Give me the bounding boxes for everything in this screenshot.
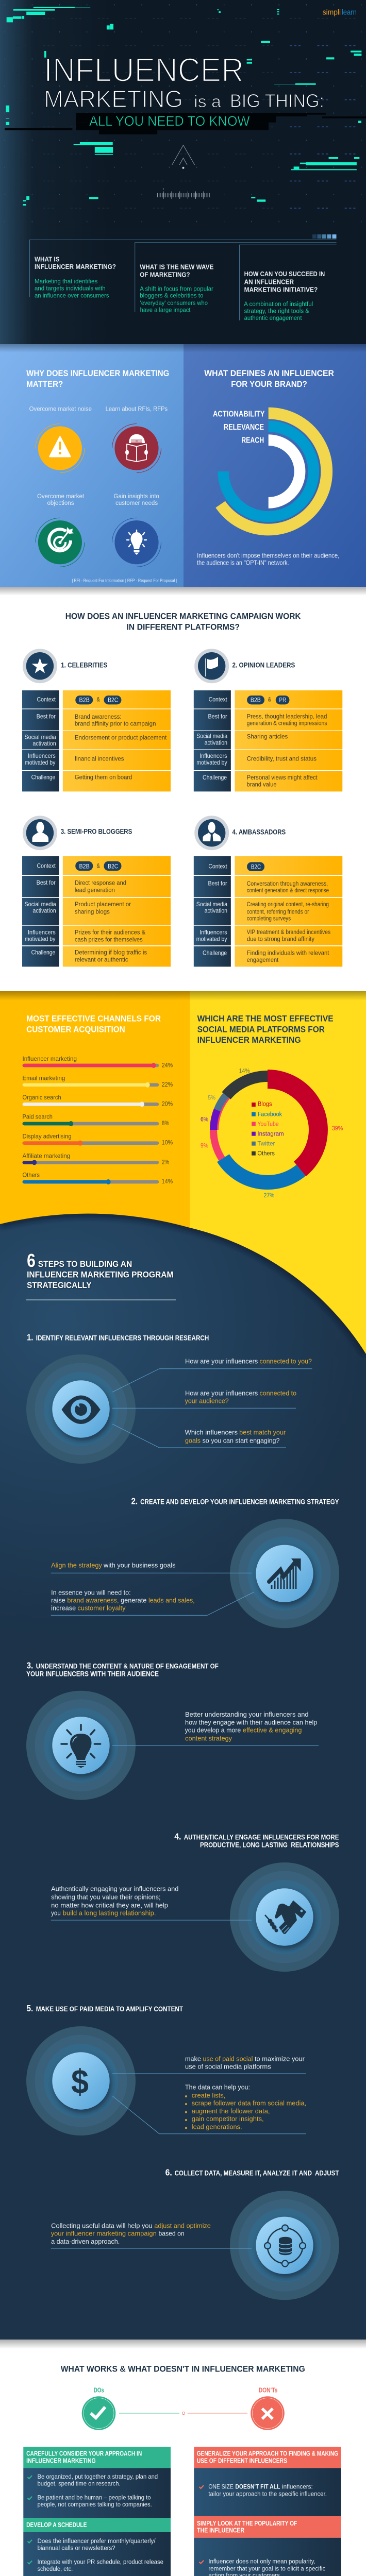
benefit labels: Learn about RFIs, RFPs [106,406,168,413]
bar chart: Organic search [22,1094,61,1101]
engagement text: Authentically engaging your influencers and [51,1886,178,1893]
icon: check badge [82,2396,115,2430]
text block: new wave of marketing: OF MARKETING? [140,271,190,279]
table: opinion leaders: Personal views might affect [247,774,318,781]
table: ambassadors: activation [205,907,227,914]
title: is a [194,92,221,111]
donut percentages: 5% [208,1094,215,1101]
text block: what is influencer marketing: WHAT IS [35,256,59,263]
table: celebrities: motivated by [25,759,55,766]
table: opinion leaders: B2B [251,697,261,704]
panel: don'ts: Influencer does not only mean popularity, [208,2558,315,2565]
heading [204,369,334,389]
heading [197,1014,334,1045]
donut percentages: 14% [239,1067,249,1074]
questions: so you can start engaging? [203,1437,280,1445]
table: opinion leaders: motivated by [196,759,227,766]
donut legend: Others [257,1150,275,1157]
table: ambassadors: Context [208,863,227,870]
data text: based on [158,2230,185,2238]
bar chart: Email marketing [22,1074,65,1081]
panel: don'ts: ONE SIZE [208,2484,234,2490]
strategy text: generate [121,1597,146,1604]
table: celebrities: Influencers [28,752,56,759]
strategy text: raise [51,1597,65,1604]
table: opinion leaders: PR [279,697,286,704]
heading: CUSTOMER ACQUISITION [26,1025,125,1035]
bar chart: Others [22,1172,40,1178]
table: semi-pro bloggers: sharing blogs [75,908,110,916]
heading: INFLUENCER MARKETING PROGRAM [27,1270,173,1280]
step 6 title [165,2168,339,2178]
step 3 title: UNDERSTAND THE CONTENT & NATURE OF ENGAGEMENT OF [36,1662,219,1670]
text block: new wave of marketing: A shift in focus from popular [140,285,213,293]
table: ambassadors: Challenge [203,950,227,956]
table: ambassadors: Finding individuals with relevant [247,950,329,957]
black title backing blocks [5,113,366,134]
table: opinion leaders: Challenge [203,774,227,781]
data text [51,2222,211,2245]
questions: connected to [260,1390,296,1397]
table: semi-pro bloggers: motivated by [25,936,55,942]
icon: reader with book [112,423,161,473]
table: celebrities: Best for [37,713,56,720]
panel: don'ts: influencers: [282,2484,313,2490]
bar chart: 22% [162,1081,173,1088]
table: semi-pro bloggers: Influencers [28,929,56,936]
data text: your influencer marketing campaign [51,2230,157,2238]
benefit labels: customer needs [115,500,158,506]
shadow under steps panel [0,2340,366,2349]
connector lines [51,1573,254,1615]
questions: How are your influencers [185,1390,258,1397]
table: celebrities: B2C [108,697,118,704]
panel: dos: people, not companies talking to companies. [37,2501,152,2508]
table: ambassadors: Best for [208,879,227,887]
strategy text: leads and sales, [148,1597,195,1604]
panel: dos: schedule, etc. [37,2566,73,2572]
table: semi-pro bloggers: Prizes for their audiences & [75,929,145,936]
questions: Which influencers [185,1429,238,1436]
questions: How are your influencers [185,1358,258,1365]
bar chart: Paid search [22,1113,53,1120]
donut legend: Instagram [257,1131,284,1138]
questions: goals [185,1437,201,1445]
benefit labels [29,406,168,506]
icon: light bulb [112,518,161,567]
icon: dollar [26,2026,136,2136]
label: opinion leaders: 2. OPINION LEADERS [232,661,295,669]
table: opinion leaders: Influencers [199,752,227,759]
colour squares [312,234,336,239]
bar chart: 20% [162,1100,173,1107]
table: semi-pro bloggers: Direct response and [75,880,126,887]
text block: how to succeed: authentic engagement [244,315,302,321]
icon: growth chart [230,1519,339,1628]
panel: dos: DEVELOP A SCHEDULE [26,2521,87,2529]
donut legend: Twitter [257,1141,275,1147]
bar chart: 8% [162,1120,169,1127]
table: semi-pro bloggers: Context [37,862,56,869]
icon: eye [26,1354,136,1464]
table: celebrities: Context [37,696,56,703]
heading: WHY DOES INFLUENCER MARKETING [26,369,169,378]
icon: handshake [230,1862,339,1972]
paid media text: to maximize your [255,2055,305,2063]
text block: how to succeed: strategy, the right tools & [244,308,309,315]
step 5 title: 5. [27,2004,33,2013]
strategy text: In essence you will need to: [51,1589,131,1597]
benefit labels: Overcome market noise [29,406,92,413]
icon: dollar: $ [71,2062,89,2100]
icon: warning [36,423,85,473]
connector [119,2412,247,2415]
table: opinion leaders: Best for [208,713,227,720]
note [197,552,339,567]
step 5 title: MAKE USE OF PAID MEDIA TO AMPLIFY CONTENT [36,2005,184,2013]
icon: cross badge [251,2396,285,2430]
paid media text: lead generations. [192,2123,242,2131]
heading: STRATEGICALLY [27,1281,92,1290]
strategy text: increase [51,1605,76,1612]
icon: data ring [230,2191,339,2300]
engagement text [51,1886,178,1917]
connector line [51,1920,252,1921]
questions: best match your [239,1429,286,1436]
text block: how to succeed: AN INFLUENCER [244,278,294,286]
panel: dos: biannual calls or newsletters? [37,2545,115,2552]
engagement text: showing that you value their opinions; [51,1894,161,1901]
paid media text: The data can help you: [185,2084,250,2091]
step 3 title [26,1660,219,1678]
table: semi-pro bloggers: Determining if blog traffic is [75,950,147,956]
text block: new wave of marketing: have a large impact [140,307,190,314]
heading: MOST EFFECTIVE CHANNELS FOR [26,1014,161,1024]
table: opinion leaders: brand value [247,782,277,788]
donut percentages [201,1067,343,1199]
heading [27,1250,173,1290]
text block: new wave of marketing [140,264,213,314]
logo: learn [342,8,357,16]
table: celebrities: Social media [25,733,56,740]
labels [94,2387,277,2394]
table: ambassadors: Social media [196,901,227,908]
questions [185,1358,312,1445]
icon: star [23,649,57,683]
connector line [112,1745,319,1746]
benefit labels: Overcome market [37,493,84,500]
strategy text: customer loyalty [77,1605,126,1612]
icon: ruler ticks [157,189,210,199]
donut legend [252,1101,284,1157]
note: the audience is an "OPT-IN" network. [197,560,289,567]
panel: dos: Does the influencer prefer monthly/quarterly/ [37,2538,156,2545]
step 4 title: 4. [174,1832,181,1842]
table: semi-pro bloggers: Social media [25,901,56,908]
table: semi-pro bloggers: relevant or authentic [75,956,128,963]
donut percentages: 39% [332,1125,343,1132]
step 5 [26,2004,306,2136]
table: celebrities: B2B [79,697,90,704]
table: opinion leaders [194,690,342,791]
donut legend: Blogs [258,1101,272,1108]
paid media text: make [185,2055,201,2063]
heading [26,1014,161,1035]
check marks [199,2485,204,2564]
donut legend: YouTube [257,1121,279,1128]
step 1 [26,1333,312,1464]
donut percentages: 27% [264,1192,274,1199]
panel: dos [23,2447,171,2576]
heading: IN DIFFERENT PLATFORMS? [126,622,240,632]
understanding text: Better understanding your influencers and [185,1711,309,1718]
bar chart: 14% [162,1178,173,1185]
title: INFLUENCER [44,51,244,89]
table: opinion leaders: Credibility, trust and status [247,756,317,762]
bar chart: 24% [162,1061,173,1069]
panel: dos: Integrate with your PR schedule, product release [37,2559,163,2566]
text block: how to succeed [244,270,325,321]
shadow under blue panels [0,587,366,596]
step 4 [51,1832,339,1972]
understanding text: you develop a more [185,1727,241,1734]
paid media text: create lists, [192,2092,225,2099]
benefit labels: Gain insights into [114,493,159,500]
text block: new wave of marketing: WHAT IS THE NEW WAVE [140,264,213,271]
title: BIG THING: [230,90,324,111]
table: celebrities: brand affinity prior to campaign [75,721,156,727]
engagement text: build a long lasting relationship. [63,1909,156,1917]
paid media text: use of social media platforms [185,2063,271,2071]
step 3 title: YOUR INFLUENCERS WITH THEIR AUDIENCE [26,1670,159,1678]
radial chart: actionability, relevance, reach [221,413,327,530]
donut percentages: 9% [201,1142,208,1149]
text block: what is influencer marketing: an influence over consumers [35,293,109,299]
chart labels: REACH [241,435,264,445]
table: celebrities: financial incentives [75,756,124,762]
label: celebrities: 1. CELEBRITIES [61,661,107,669]
text block: what is influencer marketing: and targets individuals with [35,285,106,292]
engagement text: no matter how critical they are, will help [51,1902,168,1909]
table: ambassadors: motivated by [196,936,227,942]
text block: new wave of marketing: 'everyday' consumers who [140,300,208,307]
table: semi-pro bloggers: lead generation [75,887,115,894]
label: ambassadors: 4. AMBASSADORS [232,828,286,836]
questions: connected to you? [260,1358,312,1365]
panel: what defines an influencer [184,344,366,587]
step 4 title [174,1832,339,1849]
text block: what is influencer marketing [35,256,116,299]
panel: dos: Be patient and be human – people talking to [37,2495,151,2501]
panel: don'ts: DOESN'T FIT ALL [235,2484,280,2490]
table: celebrities: activation [32,740,56,747]
heading [65,612,301,632]
section: dos and don'ts [23,2364,341,2576]
table: ambassadors: due to strong brand affinity [247,936,315,943]
table: semi-pro bloggers: B2C [108,863,118,870]
cyan glitch fragments [6,7,361,206]
data text: adjust and optimize [154,2222,211,2230]
panel: don'ts: USE OF DIFFERENT INFLUENCERS [197,2457,287,2465]
table: ambassadors: B2C [251,864,261,871]
section: campaign types [22,612,342,967]
table: semi-pro bloggers: B2B [79,863,90,870]
text block: how to succeed: A combination of insightful [244,301,313,308]
understanding text: how they engage with their audience can help [185,1719,317,1726]
panel: social media platforms [190,991,366,1360]
strategy text [51,1562,195,1612]
labels: DOs [94,2387,104,2394]
paid media text [185,2055,306,2131]
table: semi-pro bloggers: activation [32,907,56,914]
table: ambassadors [194,856,342,967]
paid media text: gain competitor insights, [192,2115,264,2123]
table: celebrities: Challenge [31,773,56,781]
step 2 title: 2. [131,1496,138,1506]
table: ambassadors: engagement [247,957,278,963]
paid media text: scrape follower data from social media, [192,2099,306,2107]
donut percentages: 6% [201,1116,208,1123]
step 1 title [27,1333,209,1343]
paid media text: augment the follower data, [192,2108,270,2115]
label: semi-pro bloggers: 3. SEMI-PRO BLOGGERS [61,827,132,836]
text block: what is influencer marketing: Marketing that identifies [35,278,97,285]
panel: dos: CAREFULLY CONSIDER YOUR APPROACH IN [26,2450,142,2458]
strategy text: brand awareness, [67,1597,119,1604]
icon: target [36,518,85,567]
bar chart [22,1055,173,1185]
bar chart: Affiliate marketing [22,1152,70,1159]
understanding text: effective & engaging [243,1727,302,1734]
text block: new wave of marketing: bloggers & celebrities to [140,293,203,299]
table: semi-pro bloggers: & [96,862,100,870]
step 1 title: IDENTIFY RELEVANT INFLUENCERS THROUGH RESEARCH [36,1334,209,1342]
donut chart [213,1076,318,1182]
text block: how to succeed: HOW CAN YOU SUCCEED IN [244,270,325,278]
step 3 [26,1660,319,1800]
chart labels: ACTIONABILITY [213,409,264,418]
panel: don'ts: THE INFLUENCER [197,2527,244,2534]
heading: INFLUENCER MARKETING [197,1036,301,1045]
bar chart: 10% [162,1139,173,1146]
heading: 6 [27,1250,36,1271]
title [44,51,324,129]
heading: STEPS TO BUILDING AN [38,1260,132,1269]
table: opinion leaders: & [268,697,271,703]
table: semi-pro bloggers [22,856,171,967]
step 2 [51,1496,339,1628]
table: ambassadors: Influencers [199,929,227,936]
table: celebrities [22,690,171,791]
panel: dos: INFLUENCER MARKETING [26,2457,96,2465]
labels: DON'Ts [259,2387,277,2394]
footnote: | RFI - Request For Information | RFP - Request For Proposal | [72,579,177,583]
connector line [51,2248,252,2249]
icon: blogger [23,816,57,850]
heading [26,369,169,389]
icon: chevron arrow [172,145,195,169]
connector lines [112,2074,306,2134]
table: ambassadors: content, referring friends or [247,908,309,916]
panel: dos: Be organized, put together a strategy, plan and [37,2473,158,2480]
table: celebrities: Brand awareness: [75,714,121,720]
table: celebrities: Endorsement or product placement [75,735,167,741]
step 6 [51,2168,339,2300]
table: semi-pro bloggers: Product placement or [75,901,131,908]
table: opinion leaders: Sharing articles [247,733,288,740]
bar chart: Influencer marketing [22,1055,77,1062]
chart labels: RELEVANCE [224,422,264,431]
panel: most effective channels [0,991,190,1360]
strategy text: Align the strategy [51,1562,102,1569]
panel lines [30,240,336,320]
heading: FOR YOUR BRAND? [231,380,307,389]
text block: what is influencer marketing: INFLUENCER MARKETING? [35,263,116,270]
panel: hero [0,0,366,344]
table: opinion leaders: Context [209,696,227,703]
table: semi-pro bloggers: cash prizes for themselves [75,936,143,943]
understanding text [185,1711,317,1742]
data text: a data-driven approach. [51,2238,120,2245]
table: opinion leaders: Social media [196,733,227,739]
step 5 title [27,2004,184,2013]
check marks [28,2476,32,2576]
panel: 6 steps [0,1214,366,2340]
questions: your audience? [185,1398,229,1405]
icon: flag [194,649,229,683]
table: celebrities: Getting them on board [75,774,132,781]
table: semi-pro bloggers: Challenge [31,949,56,956]
bar chart: Display advertising [22,1132,72,1140]
paid media text: use of paid social [203,2055,253,2063]
panel: why does influencer marketing matter [0,344,184,587]
panel: dos: budget, spend time on research. [37,2481,121,2487]
strategy text: with your business goals [103,1562,176,1569]
data text: Collecting useful data will help you [51,2222,153,2230]
bar chart: 2% [162,1158,169,1165]
engagement text: you [51,1909,61,1917]
donut legend: Facebook [258,1111,282,1118]
table: opinion leaders: Press, thought leadership, lead [247,713,327,720]
table: opinion leaders: activation [205,739,227,746]
connector lines [112,1369,312,1448]
step 6 title: 6. [165,2168,172,2178]
text block: how to succeed: MARKETING INITIATIVE? [244,286,318,294]
table: semi-pro bloggers: Best for [37,879,56,886]
icon: light bulb [26,1691,136,1800]
title: MARKETING [44,86,183,112]
heading: MATTER? [26,380,63,389]
step 1 title: 1. [27,1333,33,1343]
icon: ambassador [194,816,229,850]
logo: simpli [323,8,341,16]
chart labels [213,409,264,445]
table: celebrities: & [96,697,100,703]
title: ALL YOU NEED TO KNOW [89,113,250,129]
benefit labels: objections [47,500,74,506]
panel: don'ts [194,2447,341,2576]
step 3 title: 3. [27,1660,33,1671]
understanding text: content strategy [185,1735,232,1742]
table: ambassadors: completing surveys [247,916,291,922]
